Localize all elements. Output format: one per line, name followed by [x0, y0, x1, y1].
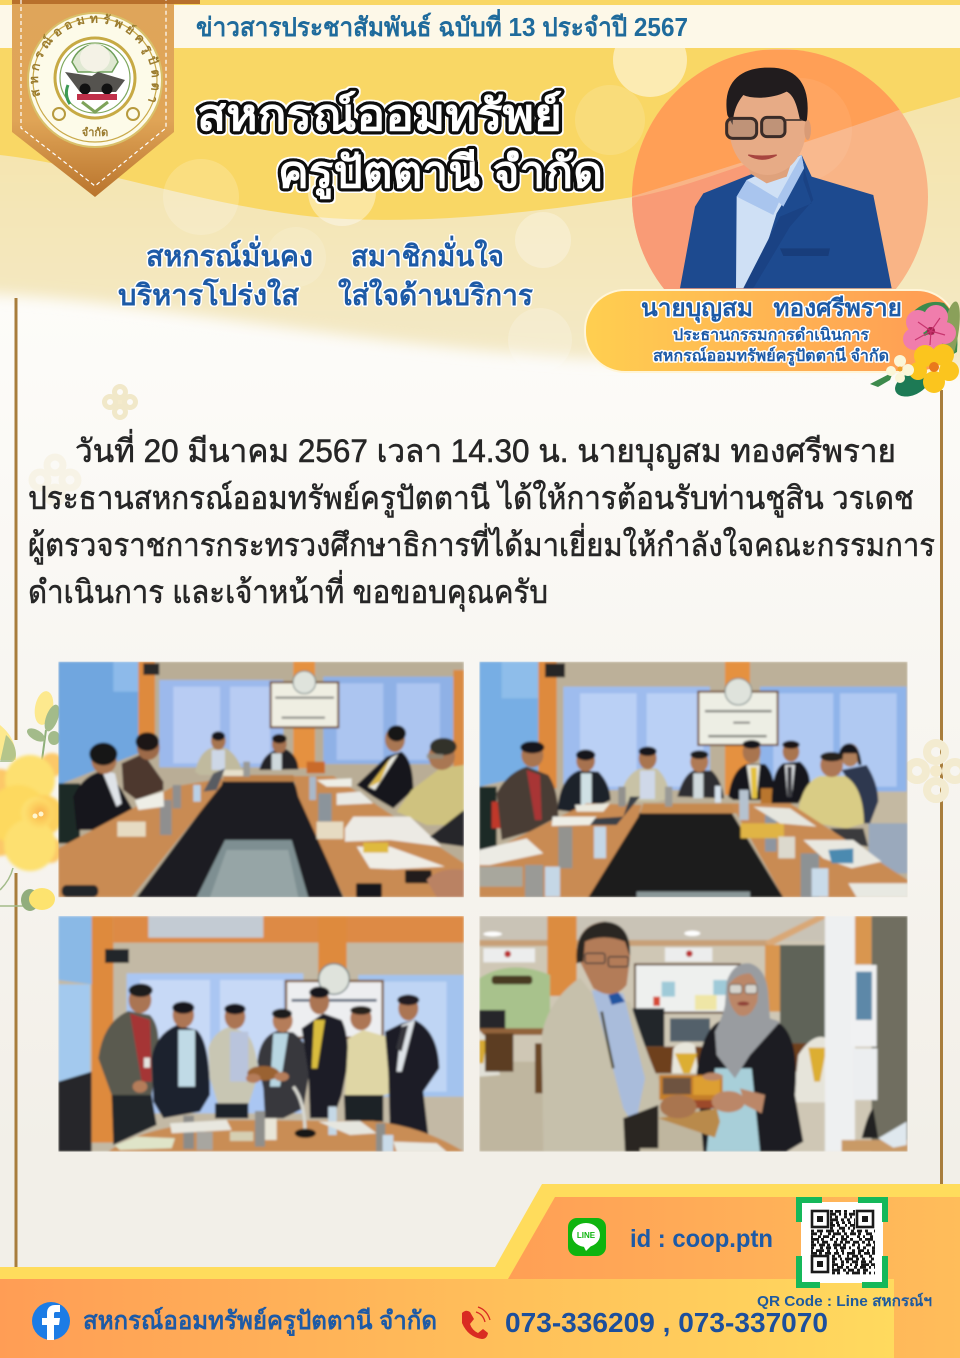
photo 1: meeting at table	[58, 662, 464, 897]
slogans: สมาชิกมั่นใจ	[351, 235, 504, 273]
people	[497, 767, 558, 840]
slogans	[118, 235, 533, 312]
LINE icon: LINE	[577, 1231, 596, 1240]
gift	[658, 1108, 720, 1138]
name and position text: นายบุญสม ทองศรีพราย	[641, 295, 902, 324]
header line text: ข่าวสารประชาสัมพันธ์ ฉบับที่ 13 ประจำปี 2567	[196, 8, 688, 42]
photo 2: group seated at table	[479, 662, 908, 897]
phone icon	[462, 1307, 490, 1339]
people	[98, 1011, 158, 1095]
ornament: right	[908, 743, 960, 799]
decorative bubbles	[163, 23, 687, 372]
table and floor	[137, 781, 343, 897]
ribbon badge with logo	[12, 0, 200, 197]
slogans: บริหารโปร่งใส	[118, 277, 299, 312]
body paragraph: วันที่ 20 มีนาคม 2567 เวลา 14.30 น. นายบุญสม ทองศรีพราย	[75, 429, 896, 471]
footer orange upper panel	[508, 1197, 960, 1358]
title: สหกรณ์ออมทรัพย์	[197, 90, 562, 140]
portrait of chairman on orange circle	[632, 49, 928, 289]
name and position text: สหกรณ์ออมทรัพย์ครูปัตตานี จำกัด	[653, 346, 889, 367]
body paragraph: ประธานสหกรณ์ออมทรัพย์ครูปัตตานี ได้ให้การต้อนรับท่านชูสิน วรเดช	[28, 480, 914, 518]
people	[73, 770, 137, 830]
yellow flowers on left edge	[0, 690, 64, 911]
name and position text: ประธานกรรมการดำเนินการ	[673, 326, 869, 344]
table	[108, 1120, 464, 1152]
photo 3: group standing	[58, 916, 464, 1152]
name and position text	[641, 295, 902, 367]
name plate	[585, 290, 957, 372]
slogans: ใส่ใจด้านบริการ	[338, 278, 533, 312]
ornament: upper left	[104, 386, 136, 418]
phone numbers: 073-336209 , 073-337070	[505, 1307, 828, 1338]
logo seal	[27, 12, 163, 148]
Facebook icon	[32, 1302, 70, 1340]
QR code	[799, 1200, 885, 1285]
body paragraph: ดำเนินการ และเจ้าหน้าที่ ขอขอบคุณครับ	[28, 570, 548, 612]
footer orange lower panel	[0, 1279, 894, 1358]
photo 4: handing over gift	[479, 916, 908, 1152]
footer yellow shape	[0, 1184, 960, 1358]
header background: pale wave	[0, 60, 960, 372]
slogans: สหกรณ์มั่นคง	[146, 235, 313, 273]
LINE id: id : coop.ptn	[630, 1225, 773, 1253]
table	[587, 810, 783, 897]
header background: yellow wave	[0, 0, 960, 220]
QR caption: QR Code : Line สหกรณ์ฯ	[757, 1292, 932, 1310]
man	[542, 978, 667, 1152]
top band	[0, 0, 960, 48]
title	[197, 90, 603, 199]
Facebook page name: สหกรณ์ออมทรัพย์ครูปัตตานี จำกัด	[83, 1306, 437, 1337]
woman	[697, 1020, 803, 1152]
flowers on name plate	[870, 300, 960, 402]
vertical frame lines	[14, 298, 943, 1267]
items	[552, 817, 597, 826]
LINE icon	[568, 1218, 606, 1256]
body paragraph	[28, 429, 935, 612]
logo seal: จำกัด	[82, 126, 108, 139]
ornament: faint left	[32, 457, 78, 503]
table items	[160, 800, 172, 835]
title: ครูปัตตานี จำกัด	[278, 148, 603, 199]
